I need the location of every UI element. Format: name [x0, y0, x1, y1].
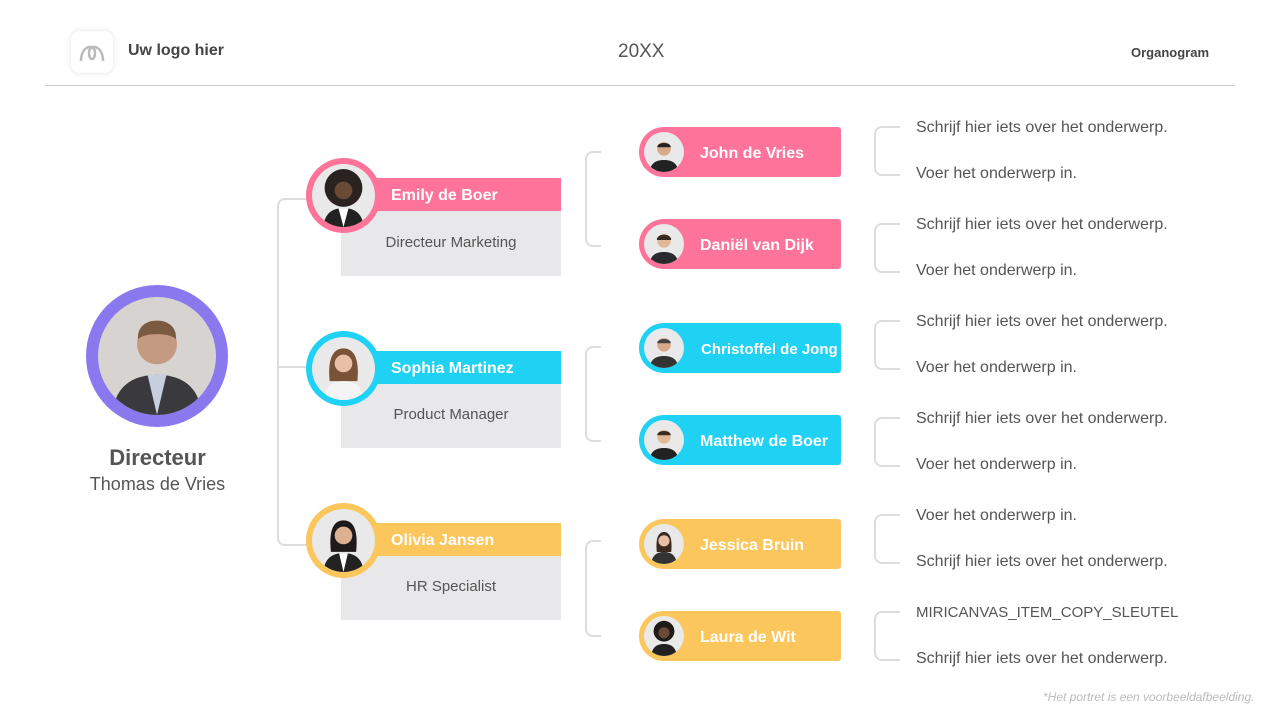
descriptions: Voer het onderwerp in. [916, 359, 1077, 376]
photo Olivia [306, 503, 381, 578]
descriptions: Voer het onderwerp in. [916, 262, 1077, 279]
manager: Emily: Directeur Marketing [386, 234, 516, 251]
director name: Thomas de Vries [90, 474, 225, 494]
director title: Directeur [109, 445, 206, 470]
descriptions: Voer het onderwerp in. [916, 507, 1077, 524]
employee: Matthew: Matthew de Boer [700, 432, 828, 450]
manager: Olivia: HR Specialist [406, 578, 496, 595]
employee: John [639, 127, 841, 177]
descriptions: Voer het onderwerp in. [916, 456, 1077, 473]
manager bracket [277, 198, 310, 546]
director [86, 285, 228, 494]
doc title: Organogram [1131, 45, 1209, 60]
manager: Emily: Emily de Boer [391, 186, 498, 204]
employee: Christoffel [639, 323, 841, 373]
logo text: Uw logo hier [128, 42, 224, 59]
manager: Sophia: Sophia Martinez [391, 360, 514, 376]
employee: Laura [639, 611, 841, 661]
footnote: *Het portret is een voorbeeldafbeelding. [1043, 690, 1254, 704]
descriptions: Schrijf hier iets over het onderwerp. [916, 650, 1168, 667]
manager: Sophia: Product Manager [393, 406, 509, 423]
employee: Christoffel: Christoffel de Jong [701, 341, 838, 358]
manager: Sophia [306, 331, 561, 448]
header logo [71, 31, 113, 73]
text brackets [874, 126, 900, 176]
descriptions: Voer het onderwerp in. [916, 165, 1077, 182]
manager: Emily [306, 158, 561, 276]
employee: Daniel [639, 219, 841, 269]
descriptions: MIRICANVAS_ITEM_COPY_SLEUTEL [916, 604, 1178, 621]
employee: Jessica: Jessica Bruin [700, 536, 804, 554]
sub brackets [585, 151, 601, 247]
descriptions: Schrijf hier iets over het onderwerp. [916, 119, 1168, 136]
descriptions [916, 119, 1178, 667]
employee: John: John de Vries [700, 144, 804, 162]
manager: Olivia [306, 503, 561, 620]
employee: Jessica [639, 519, 841, 569]
director photo [86, 285, 228, 427]
photo Sophia [306, 331, 381, 406]
photo Emily [306, 158, 381, 233]
descriptions: Schrijf hier iets over het onderwerp. [916, 313, 1168, 330]
manager: Olivia: Olivia Jansen [391, 532, 494, 548]
descriptions: Schrijf hier iets over het onderwerp. [916, 216, 1168, 233]
employee: Laura: Laura de Wit [700, 628, 796, 646]
employee: Matthew [639, 415, 841, 465]
year: 20XX [618, 41, 664, 62]
employee: Daniel: Daniël van Dijk [700, 236, 814, 254]
descriptions: Schrijf hier iets over het onderwerp. [916, 410, 1168, 427]
descriptions: Schrijf hier iets over het onderwerp. [916, 553, 1168, 570]
